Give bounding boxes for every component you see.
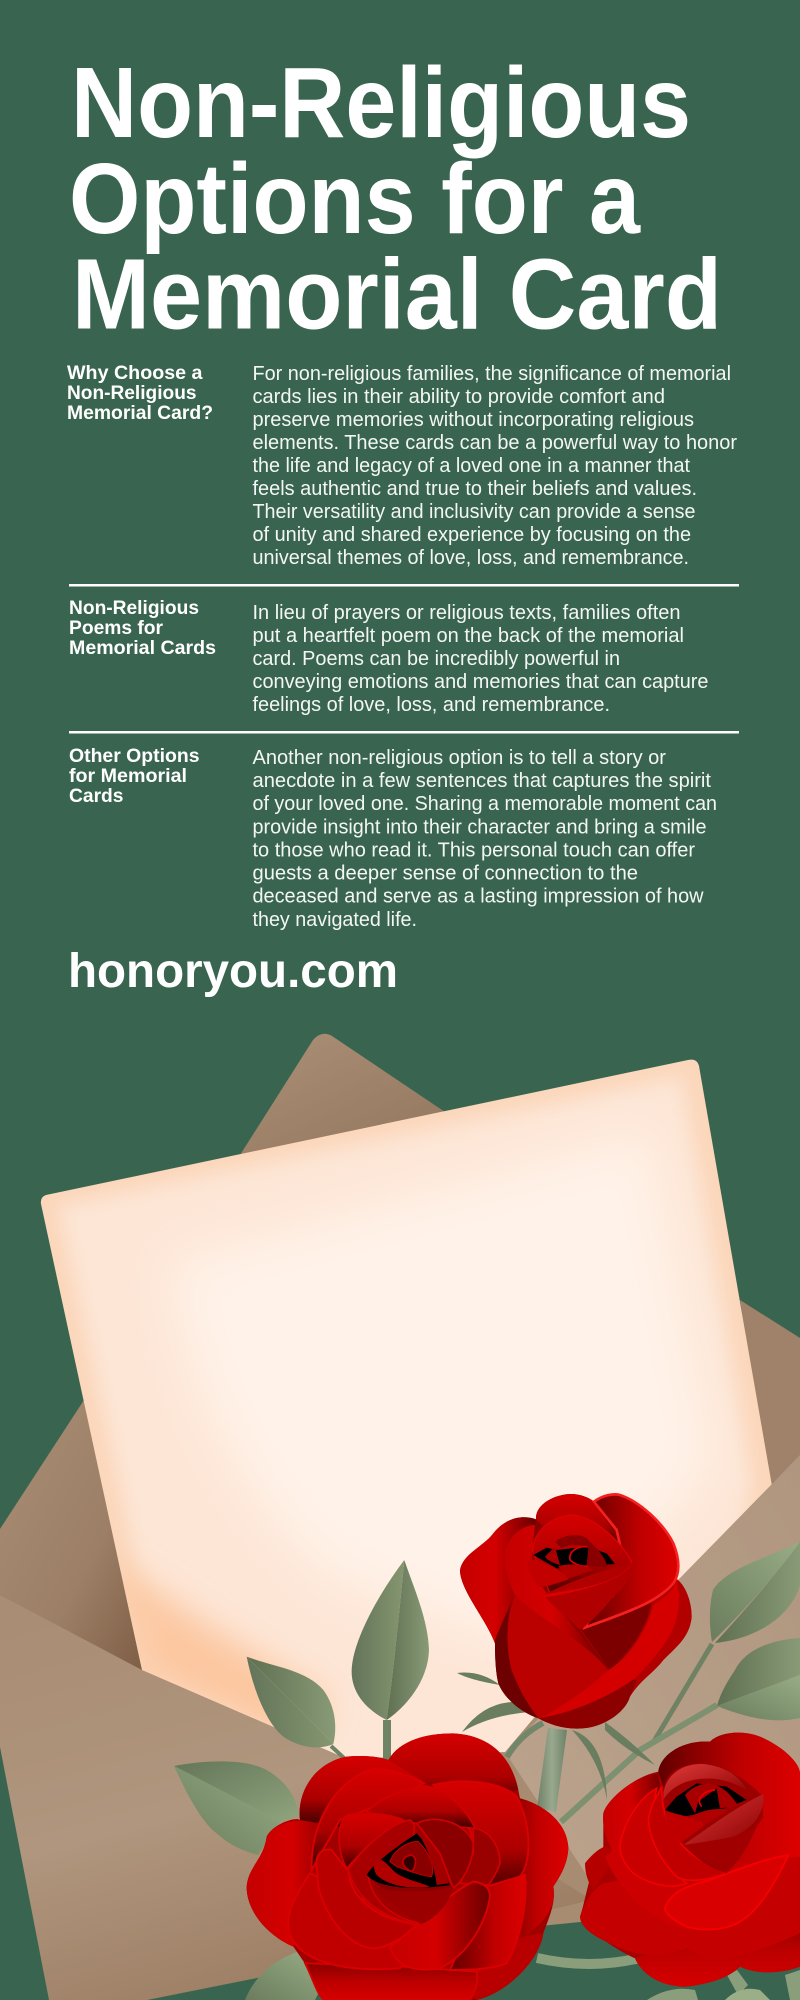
body text: why choose: cards lies in their ability to provide comfort and <box>252 386 665 408</box>
memorial card <box>41 1060 772 1800</box>
leaf: left <box>247 1657 335 1747</box>
heading: why choose: Memorial Card? <box>67 402 213 424</box>
title: Memorial Card <box>72 238 722 350</box>
heading: other options: Other Options <box>69 745 200 767</box>
heading: other options: Cards <box>69 785 124 807</box>
rose: right <box>580 1733 800 1987</box>
leaf: lower left <box>174 1761 299 1855</box>
title: Options for a <box>69 143 641 255</box>
envelope back flap <box>240 1034 500 1155</box>
stem of tall leaf <box>383 1720 391 1762</box>
leaf: middle right <box>717 1638 800 1720</box>
heading: other options: for Memorial <box>69 765 187 787</box>
body text: other options: deceased and serve as a lasting impression of how <box>252 886 704 908</box>
envelope right inner <box>740 1300 800 1486</box>
body text: other options: provide insight into their character and bring a smile <box>252 816 706 838</box>
rose: large center <box>247 1733 568 2000</box>
leaf: tall <box>352 1560 429 1720</box>
body text: why choose: universal themes of love, loss, and remembrance. <box>252 547 689 569</box>
body text: other options <box>252 747 717 931</box>
body text: other options: they navigated life. <box>252 909 417 931</box>
envelope left inner <box>0 1400 145 1675</box>
heading: why choose: Why Choose a <box>67 362 203 384</box>
heading: why choose: Non-Religious <box>67 382 197 404</box>
body text: poems <box>252 602 708 716</box>
body text: why choose: For non-religious families, the significance of memorial <box>252 363 731 385</box>
body text: why choose: elements. These cards can be a powerful way to honor <box>252 432 737 454</box>
website url: honoryou.com <box>68 945 398 998</box>
body text: poems: card. Poems can be incredibly powerful in <box>252 648 620 670</box>
leaves: bottom right <box>647 1970 800 2000</box>
body text: why choose: feels authentic and true to their beliefs and values. <box>252 478 697 500</box>
body text: other options: Another non-religious option is to tell a story or <box>252 747 666 769</box>
envelope front right pocket <box>505 1455 800 1890</box>
envelope front left pocket <box>0 1595 592 2000</box>
section: why choose a non-religious memorial card <box>67 362 737 569</box>
section: non-religious poems <box>69 597 708 716</box>
body text: why choose: of unity and shared experience by focusing on the <box>252 524 691 546</box>
section: other options <box>69 745 717 931</box>
body text: other options: guests a deeper sense of connection to the <box>252 862 638 884</box>
heading: poems <box>69 597 216 659</box>
heading: poems: Poems for <box>69 617 163 639</box>
stem of top rose <box>537 1728 567 1812</box>
illustration: envelope with card and roses <box>0 1034 800 2000</box>
heading: poems: Memorial Cards <box>69 637 216 659</box>
heading: why choose <box>67 362 213 424</box>
title: Non-Religious <box>71 47 691 159</box>
body text: poems: put a heartfelt poem on the back of the memorial <box>252 625 684 647</box>
title <box>69 47 722 350</box>
body text: other options: anecdote in a few sentences that captures the spirit <box>252 770 711 792</box>
stems and thin leaves <box>331 1644 717 1964</box>
heading: poems: Non-Religious <box>69 597 199 619</box>
leaf: bottom left <box>245 1952 320 2000</box>
body text: other options: of your loved one. Sharing a memorable moment can <box>252 793 717 815</box>
body text: poems: In lieu of prayers or religious texts, families often <box>252 602 680 624</box>
body text: poems: feelings of love, loss, and remembrance. <box>252 694 610 716</box>
body text: why choose: the life and legacy of a loved one in a manner that <box>252 455 690 477</box>
heading: other options <box>69 745 200 807</box>
stem of left leaf <box>331 1746 344 1758</box>
body text: poems: conveying emotions and memories that can capture <box>252 671 708 693</box>
body text: why choose: preserve memories without incorporating religious <box>252 409 694 431</box>
body text: why choose <box>252 363 737 569</box>
body text: why choose: Their versatility and inclusivity can provide a sense <box>252 501 696 523</box>
leaf: upper right <box>710 1542 800 1643</box>
body text: other options: to those who read it. This personal touch can offer <box>252 840 695 862</box>
rose: top <box>460 1494 692 1729</box>
envelope central seam <box>300 1640 660 1950</box>
